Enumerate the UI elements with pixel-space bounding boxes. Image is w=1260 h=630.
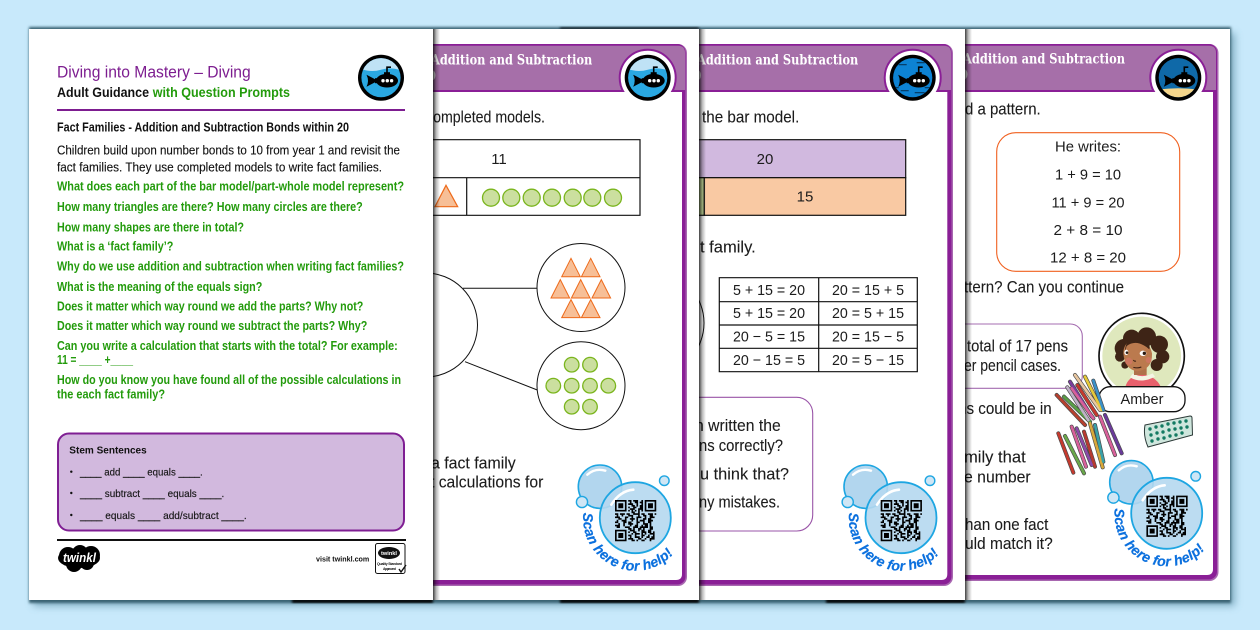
intro text: fact families. They use completed models to write fact families. [57,160,382,175]
QR help bubbles [576,464,672,571]
illustration: coloured pens [1057,375,1122,473]
purple callout: pens [965,324,1083,389]
purple page frame [950,44,1218,581]
purple header band [950,46,1216,90]
header title: Addition and Subtraction [696,53,858,69]
fact family table: 20 = 15 − 5 [832,328,904,345]
orange pattern box: 12 + 8 = 20 [1050,250,1126,267]
panel: stem sentences: ____ subtract ____ equals ____. [79,488,224,500]
adult guidance page [29,29,433,600]
intro text [57,142,400,175]
fact family table: 20 − 5 = 15 [733,328,805,345]
character: Amber: Amber [1120,391,1164,408]
fact family table [719,278,917,372]
fact family table: 5 + 15 = 20 [733,282,805,299]
purple header band [680,46,951,90]
panel: stem sentences [58,434,404,530]
fact family table: 20 = 5 + 15 [832,305,904,322]
fact family table: 20 = 5 − 15 [832,352,904,369]
header title [699,54,858,80]
QR help bubbles: Scan here for help! [1114,508,1204,566]
quality stamp: Approved [383,567,396,571]
worksheet page: bar model and fact family table [699,29,965,600]
bar model: shapes [420,140,640,215]
question prompts: How do you know you have found all of the possible calculations in [57,372,401,387]
worksheet page: shapes models [433,29,699,600]
purple header band [414,46,685,90]
question text: write fact family: t calculations for [430,474,544,492]
orange pattern box: 2 + 8 = 10 [1054,222,1122,239]
header title: 20 [683,69,702,85]
panel: stem sentences: ____ add ____ equals ____. [79,467,203,479]
question prompts [57,179,404,402]
logo: twinkl [58,545,100,572]
logo: twinkl: twinkl [63,550,96,565]
question text: part b: mily that [964,448,1026,466]
question text: fact family: t family. [700,239,756,257]
title: Diving into Mastery – Diving [57,63,251,82]
character: Amber [1099,313,1185,412]
worksheet page: diving practice [965,29,1230,600]
quality stamp [376,544,406,574]
question prompts: 11 = ____ +____ [57,352,134,367]
question prompts: Does it matter which way round we subtract the parts? Why? [57,318,367,333]
question text: part c: han one fact [965,516,1049,534]
purple callout: mistakes: ny mistakes. [699,493,780,511]
fact family table: 20 = 15 + 5 [832,282,904,299]
part circle: triangles [537,244,625,332]
question text: part a: ns could be in [958,400,1052,418]
QR help bubbles: Scan here for help! [848,512,938,571]
question text: write fact family [433,456,544,488]
purple page frame [680,44,953,586]
intro text: Children build upon number bonds to 10 from year 1 and revisit the [57,142,400,157]
subtitle: Adult Guidance [57,85,149,100]
question text: write fact family: a fact family [431,454,516,472]
part circle: green circles [537,342,625,430]
purple callout: mistakes: n written the [695,417,781,435]
question text: pattern: d a pattern. [965,100,1041,118]
quality stamp: Quality Standard [377,562,402,566]
orange pattern box: 1 + 9 = 10 [1055,166,1121,183]
question text: completed models: completed models. [426,109,545,127]
badge: submarine [358,55,404,101]
bar model: 20 and 15: 15 [797,189,813,206]
question text: continue pattern: ttern? Can you continue [964,278,1124,296]
purple callout: mistakes: u think that? [700,465,789,483]
fact family table: 5 + 15 = 20 [733,305,805,322]
purple callout: pens: total of 17 pens [967,338,1068,356]
footer link text: visit twinkl.com [316,555,370,564]
orange pattern box: He writes: [1055,139,1121,156]
panel: stem sentences: ____ equals ____ add/subtract ____. [79,510,247,522]
badge: submarine on seabed [1150,50,1206,106]
question prompts: Why do we use addition and subtraction when writing fact families? [57,259,404,274]
question prompts: What is the meaning of the equals sign? [57,279,262,294]
question text: part c [966,518,1052,549]
panel: stem sentences: Stem Sentences [69,444,147,456]
question prompts: the each fact family? [57,387,165,402]
question prompts: How many triangles are there? How many circles are there? [57,199,363,214]
purple callout: pens: er pencil cases. [964,357,1061,375]
question prompts: How many shapes are there in total? [57,219,244,234]
question prompts: What does each part of the bar model/part-whole model represent? [57,179,404,194]
QR help bubbles: Scan here for help! [582,512,672,571]
header title: Addition and Subtraction [430,53,592,69]
question text: part c: uld match it? [965,535,1053,553]
part-whole circle edge [699,300,704,346]
fact family table: 20 − 15 = 5 [733,352,805,369]
orange pattern box [997,133,1180,271]
header title [433,54,592,80]
orange pattern box: 11 + 9 = 20 [1052,194,1124,211]
purple page frame [414,44,687,586]
part-whole model [433,243,626,430]
question text: bar model: the bar model. [702,109,799,127]
illustration: pencil case [1144,416,1192,447]
question prompts: What is a ‘fact family’? [57,238,173,253]
header title [965,53,1125,79]
bar model: shapes: 11 [491,151,507,168]
question prompts: Can you write a calculation that starts with the total? For example: [57,338,398,353]
header title: 20 [949,68,968,84]
section heading: Fact Families - Addition and Subtraction Bonds within 20 [57,121,349,135]
quality stamp: twinkl [381,551,397,557]
question prompts: Does it matter which way round we add the parts? Why not? [57,298,363,313]
header title: Addition and Subtraction [962,52,1125,68]
bar model: 20 and 15: 20 [757,151,773,168]
badge: submarine at surface [620,50,676,106]
question text: part b [965,450,1030,482]
badge: submarine in deep water [885,50,941,106]
purple callout: mistakes [699,396,814,532]
QR help bubbles [1107,460,1204,566]
bar model: 20 and 15 [680,140,906,215]
subtitle: with Question Prompts [152,85,290,100]
header title: 20 [417,69,436,85]
subtitle [57,85,290,100]
question text: part b: e number [964,468,1031,486]
QR help bubbles [841,464,938,571]
purple callout: mistakes: ns correctly? [699,437,783,455]
